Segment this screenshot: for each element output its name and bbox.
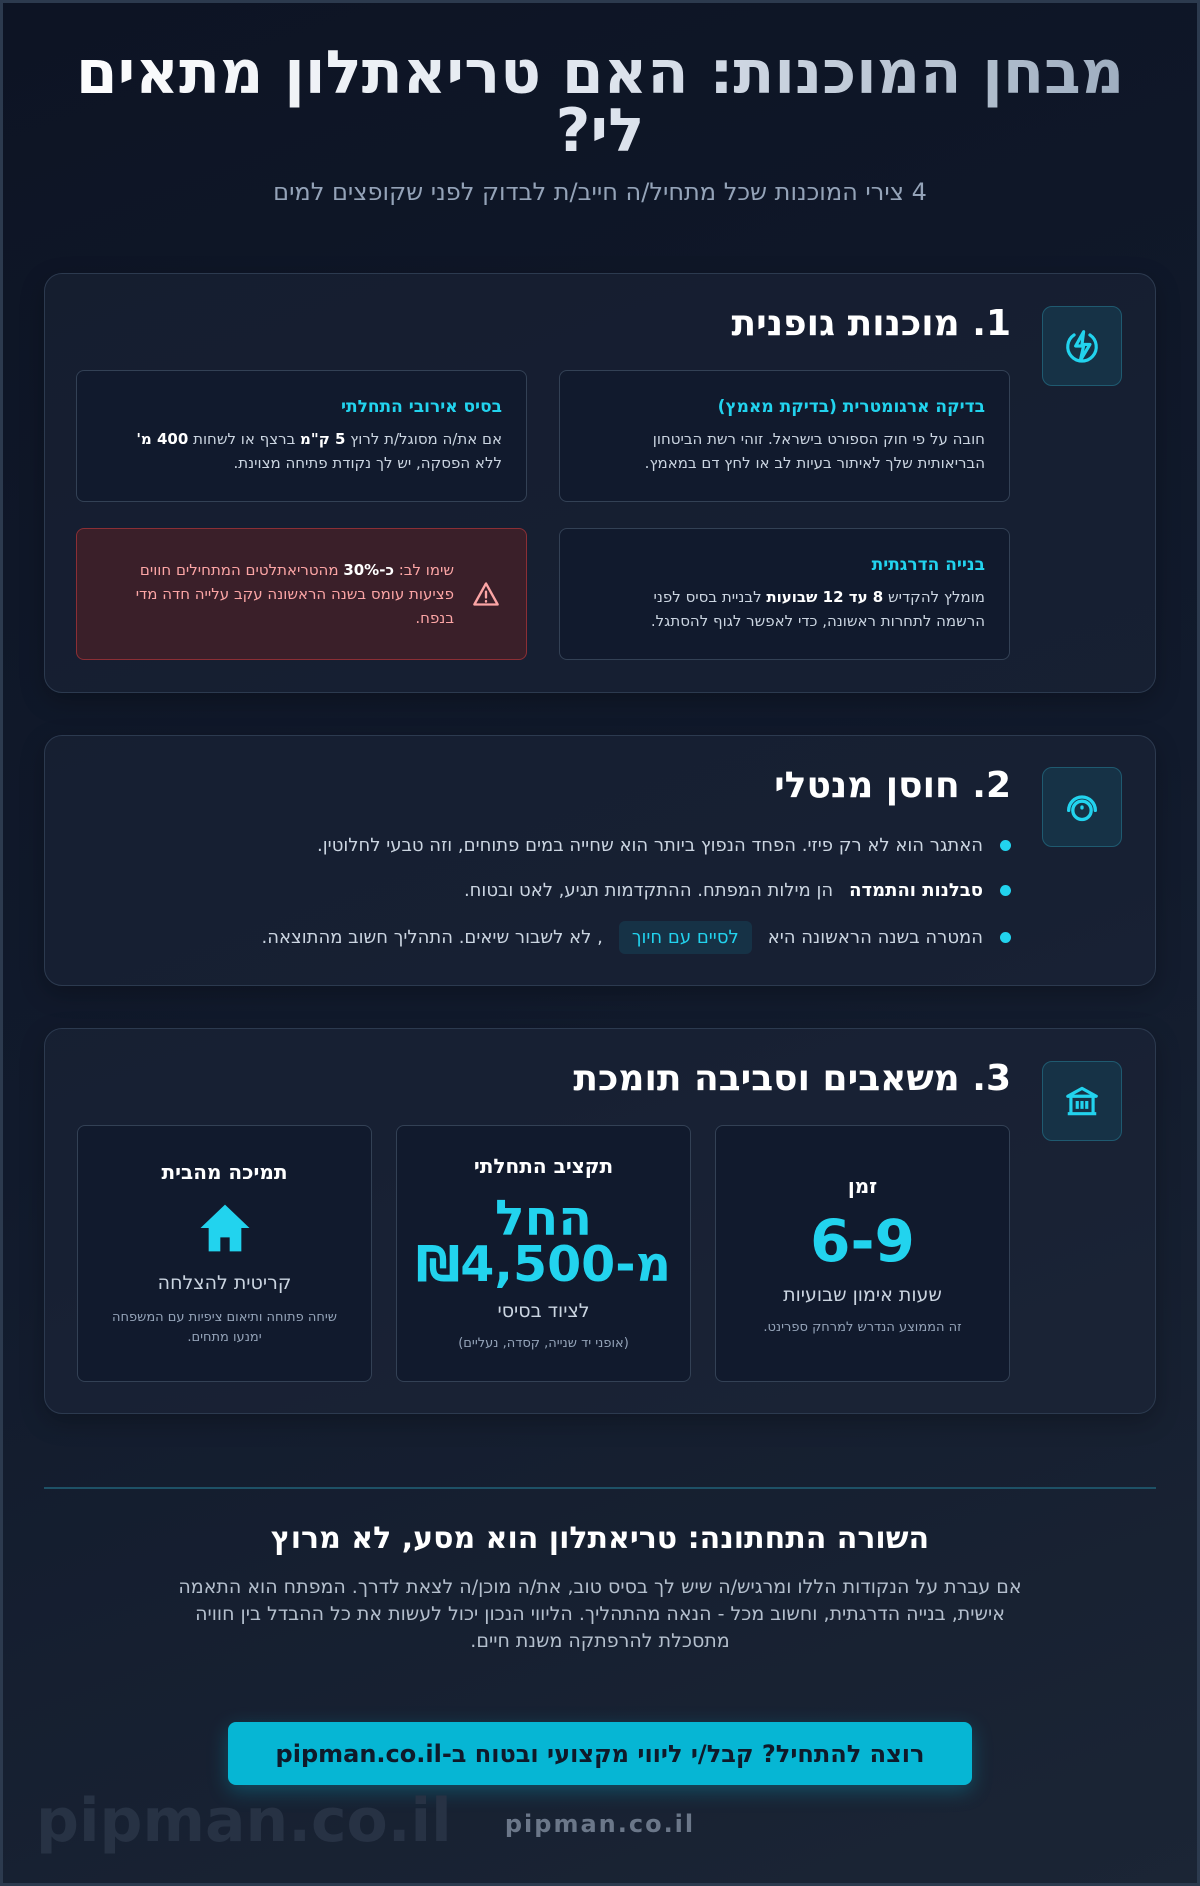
icon: lightning	[1042, 306, 1122, 386]
icon: warning	[473, 582, 499, 606]
callout: warning	[76, 528, 527, 660]
stat card: budget: מ-₪4,500	[416, 1236, 671, 1292]
subtitle: 4 צירי המוכנות שכל מתחיל/ה חייב/ת לבדוק לפני שקופצים למים	[273, 178, 927, 206]
stat card: time: זמן	[848, 1174, 877, 1198]
card: aerobic base: בסיס אירובי התחלתי	[341, 397, 502, 417]
stat card: time: 6-9	[810, 1206, 915, 1274]
heading: resources: 3. משאבים וסביבה תומכת	[573, 1058, 1011, 1099]
title: מבחן המוכנות: האם טריאתלון מתאים לי?	[76, 38, 1124, 166]
panel: physical readiness	[44, 273, 1156, 693]
stat card: time: זה הממוצע הנדרש למרחק ספרינט.	[763, 1320, 962, 1334]
panel: mental resilience	[44, 735, 1156, 986]
card: gradual build	[559, 528, 1010, 660]
heading: physical readiness: 1. מוכנות גופנית	[732, 303, 1011, 344]
CTA button	[228, 1722, 972, 1785]
icon: mind	[1042, 767, 1122, 847]
bottom line heading: השורה התחתונה: טריאתלון הוא מסע, לא מרוץ	[271, 1521, 929, 1556]
stat card: family support: תמיכה מהבית	[162, 1160, 288, 1184]
card: ergometric test: בדיקה ארגומטרית (בדיקת מאמץ)	[718, 397, 985, 417]
card: gradual build: בנייה הדרגתית	[872, 555, 985, 575]
bullet 1: האתגר הוא לא רק פיזי. הפחד הנפוץ ביותר הוא שחייה במים פתוחים, וזה טבעי לחלוטין.	[317, 835, 983, 856]
bottom line paragraph: אם עברת על הנקודות הללו ומרגיש/ה שיש לך בסיס טוב, את/ה מוכן/ה לצאת לדרך. המפתח הוא התאמה אישית, בנייה הדרגתית, וחשוב מכל - הנאה מהתהליך. הליווי הנכון יכול לעשות את כל ההבדל בין חוויה מתסכלת להרפתקה משנת חיים.	[178, 1576, 1022, 1652]
bullet 3: המטרה בשנה הראשונה היא, לא לשבור שיאים. התהליך חשוב מהתוצאה.	[262, 927, 983, 948]
bullet 3	[262, 921, 1011, 954]
card: ergometric test	[559, 370, 1010, 502]
stat card: budget: תקציב התחלתי	[474, 1154, 613, 1178]
card: aerobic base	[76, 370, 527, 502]
icon: building	[1042, 1061, 1122, 1141]
heading: mental resilience: 2. חוסן מנטלי	[774, 765, 1011, 806]
stat card: family support: שיחה פתוחה ותיאום ציפיות עם המשפחה ימנעו מתחים.	[112, 1310, 337, 1344]
panel: resources and support	[44, 1028, 1156, 1414]
stat card: budget: (אופני יד שנייה, קסדה, נעליים)	[458, 1336, 629, 1350]
stat card: budget	[396, 1125, 691, 1382]
stat card: time: שעות אימון שבועיות	[783, 1284, 942, 1306]
CTA button: רוצה להתחיל? קבל/י ליווי מקצועי ובטוח ב-pipman.co.il	[276, 1740, 924, 1768]
callout: warning: שימו לב: כ-30% מהטריאתלטים המתחילים חווים פציעות עומס בשנה הראשונה עקב עלייה חדה מדי בנפח.	[136, 561, 454, 627]
stat card: family support	[77, 1125, 372, 1382]
card: ergometric test: חובה על פי חוק הספורט בישראל. זוהי רשת הביטחון הבריאותית שלך לאיתור בעיות לב או לחץ דם במאמץ.	[645, 430, 985, 472]
bullet 2: סבלנות והתמדה	[849, 880, 983, 901]
stat card: budget: החל	[495, 1190, 592, 1246]
icon: house	[200, 1204, 250, 1252]
stat card: budget: לציוד בסיסי	[497, 1300, 590, 1322]
bullet 2	[464, 880, 1011, 901]
stat card: family support: קריטית להצלחה	[158, 1272, 291, 1294]
card: aerobic base: אם את/ה מסוגל/ת לרוץ 5 ק"מ ברצף או לשחות 400 מ' ללא הפסקה, יש לך נקודת פתיחה מצוינת.	[136, 430, 502, 472]
watermark: pipman.co.il	[36, 1786, 452, 1856]
bullet 3: לסיים עם חיוך	[632, 927, 739, 948]
bullet 2: הן מילות המפתח. ההתקדמות תגיע, לאט ובטוח.	[464, 880, 833, 901]
card: gradual build: מומלץ להקדיש 8 עד 12 שבועות לבניית בסיס לפני הרשמה לתחרות ראשונה, כדי לאפשר לגוף להסתגל.	[651, 588, 985, 630]
stat card: time	[715, 1125, 1010, 1382]
footer brand: pipman.co.il	[505, 1810, 695, 1838]
